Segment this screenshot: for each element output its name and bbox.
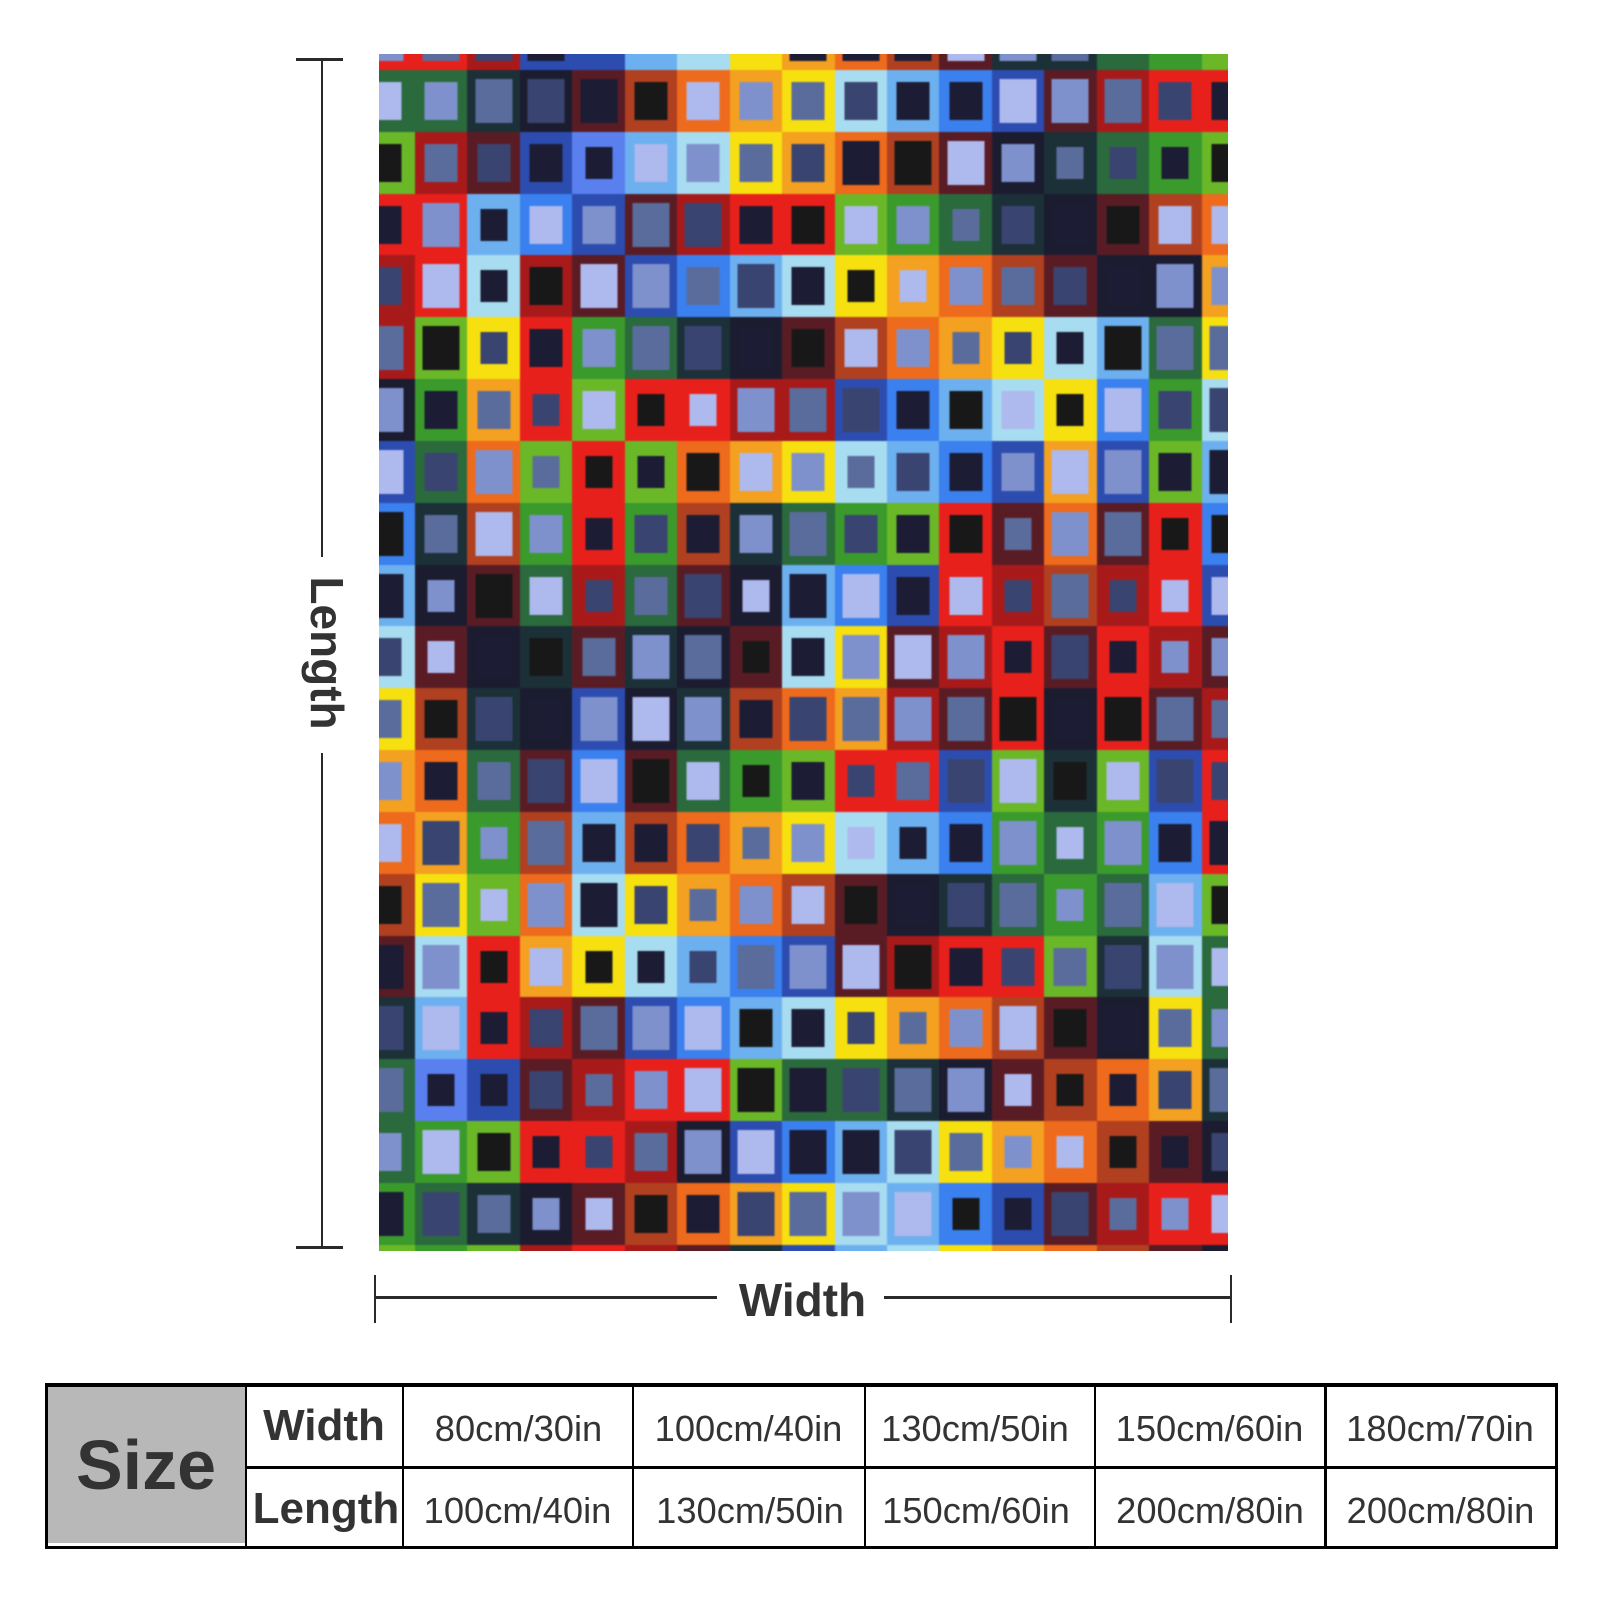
size table: 130cm/50in xyxy=(656,1489,844,1530)
size heading cell xyxy=(48,1386,244,1543)
size table: 200cm/80in xyxy=(1116,1489,1304,1530)
width dimension arrow with label: Width xyxy=(739,1274,866,1326)
size table: 150cm/60in xyxy=(882,1489,1070,1530)
length dimension arrow with label xyxy=(296,58,353,1249)
blanket artwork: colourful squares grid xyxy=(379,54,1228,1251)
size table: 150cm/60in xyxy=(1116,1407,1303,1448)
size table: 100cm/40in xyxy=(655,1407,842,1448)
length row label: Length xyxy=(253,1484,399,1533)
length dimension arrow with label: Length xyxy=(301,576,353,730)
length row values: 100cm/40in xyxy=(424,1489,611,1530)
width dimension arrow with label xyxy=(374,1274,1232,1326)
size table xyxy=(45,1383,1558,1549)
size heading cell: Size xyxy=(76,1426,216,1504)
size table: 200cm/80in xyxy=(1347,1489,1534,1530)
size table: 130cm/50in xyxy=(881,1407,1069,1448)
size table: 180cm/70in xyxy=(1346,1407,1534,1448)
width row values: 80cm/30in xyxy=(435,1407,602,1448)
width row label: Width xyxy=(263,1400,385,1450)
